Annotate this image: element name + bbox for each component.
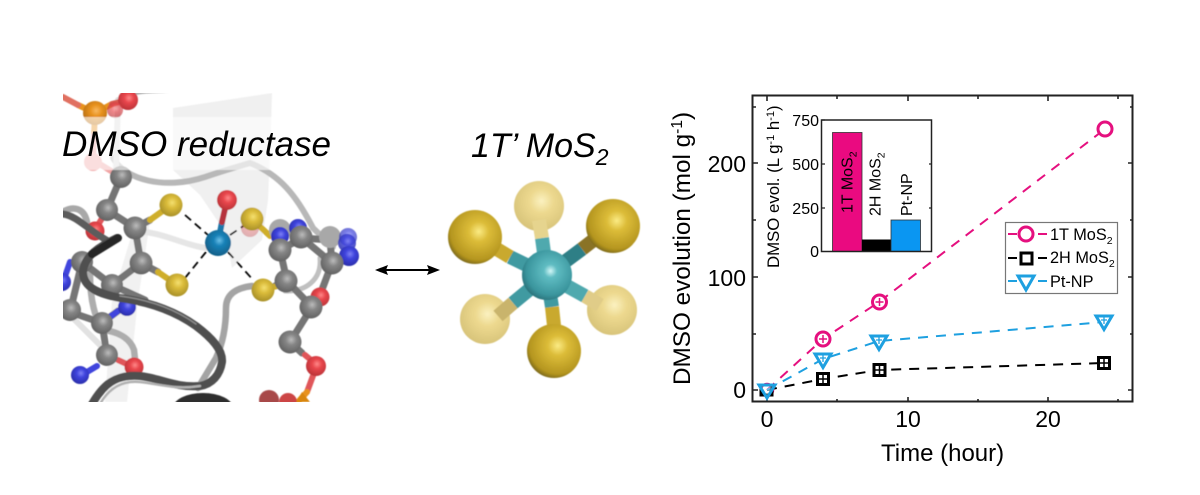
faded oxygen under title (84, 153, 102, 171)
legend: 1T MoS2 (1008, 226, 1113, 247)
axes frame (752, 96, 1132, 402)
panel: DMSO reductase active site (63, 93, 360, 402)
sulfur atoms (160, 194, 274, 302)
ligand bonds (63, 97, 332, 402)
nitrogen atoms (53, 219, 359, 384)
background protein sheet (105, 93, 272, 402)
rear nitrogen cluster backdrop (269, 219, 341, 248)
series: Pt-NP (767, 316, 1112, 390)
series: 1T MoS2 (767, 122, 1112, 390)
y tick labels: 100 (708, 265, 746, 291)
orange phosphate bottom (296, 392, 310, 402)
inset bar chart: Pt-NP (899, 173, 916, 216)
foreground carbon atoms (268, 226, 344, 354)
x tick labels: 20 (1035, 406, 1061, 432)
legend: 2H MoS2 (1008, 249, 1115, 270)
front sulfur atoms (448, 199, 640, 378)
molybdenum centre (522, 250, 572, 300)
x tick labels: 10 (895, 406, 921, 432)
inset y axis title: DMSO evol. (L g (764, 145, 783, 268)
inset frame (822, 120, 932, 252)
legend: 1T MoS2: 1T MoS (1050, 226, 1107, 244)
title: 1T' MoS2: 1T’ MoS (471, 127, 596, 165)
legend: Pt-NP: Pt-NP (1050, 273, 1093, 291)
rear sulfur atoms (460, 181, 637, 344)
inset y tick labels: 0 (810, 244, 819, 261)
inset ticks (822, 120, 932, 208)
carbon atoms (59, 166, 152, 366)
title: 1T' MoS2: 2 (595, 144, 609, 170)
legend (1006, 222, 1118, 294)
dashed Mo-S coordination (185, 215, 254, 281)
inset y tick labels: 500 (792, 157, 819, 174)
title: DMSO reductase: DMSO reductase (62, 125, 331, 164)
Mo-S bonds (490, 220, 600, 335)
y axis title: DMSO evolution (mol g (669, 134, 696, 385)
x tick labels (761, 406, 1061, 432)
inset y tick labels: 250 (792, 201, 819, 218)
inset bar chart: 2H MoS (868, 158, 884, 216)
light protein ribbons (63, 88, 333, 388)
oxo atom (217, 190, 237, 210)
y tick labels: 200 (708, 151, 746, 177)
y tick labels (708, 151, 746, 403)
y tick labels: 0 (733, 377, 746, 403)
x axis title: Time (hour) (881, 440, 1004, 467)
legend: 1T MoS2: 2 (1107, 235, 1113, 247)
molybdenum atom (205, 230, 231, 256)
legend: 2H MoS2: 2 (1109, 258, 1115, 270)
x tick labels: 0 (761, 406, 773, 432)
panel: MoS2 octahedral model (448, 181, 640, 378)
series: 2H MoS2 (767, 358, 1110, 390)
dark protein ribbon (63, 214, 222, 404)
bar: 1T MoS2 (832, 132, 862, 252)
inset y axis title: -1 (765, 111, 777, 121)
bar: 2H MoS2 (862, 240, 891, 252)
bar labels: 1T MoS (840, 157, 856, 213)
y axis title: ) (669, 112, 696, 120)
inset bar chart: 2 (876, 152, 888, 158)
inset y tick labels (792, 113, 819, 261)
phosphate atom (83, 101, 107, 125)
inset bar chart (764, 105, 932, 268)
bar: Pt-NP (891, 220, 920, 252)
tick marks (753, 96, 1133, 402)
dark bottom helix (174, 392, 232, 402)
bar labels: 2 (848, 151, 860, 157)
inset y tick labels: 750 (792, 113, 819, 130)
double-headed arrow (375, 265, 440, 275)
line chart: DMSO evolution (669, 96, 1133, 467)
oxygen atoms (86, 90, 330, 411)
inset y axis title: h (764, 121, 783, 135)
inset y axis title: -1 (765, 135, 777, 145)
white title veil (82, 116, 270, 171)
origin markers (759, 384, 775, 398)
inset y axis title: ) (764, 105, 783, 111)
legend: 2H MoS2: 2H MoS (1050, 249, 1109, 267)
y axis title: -1 (669, 120, 686, 134)
